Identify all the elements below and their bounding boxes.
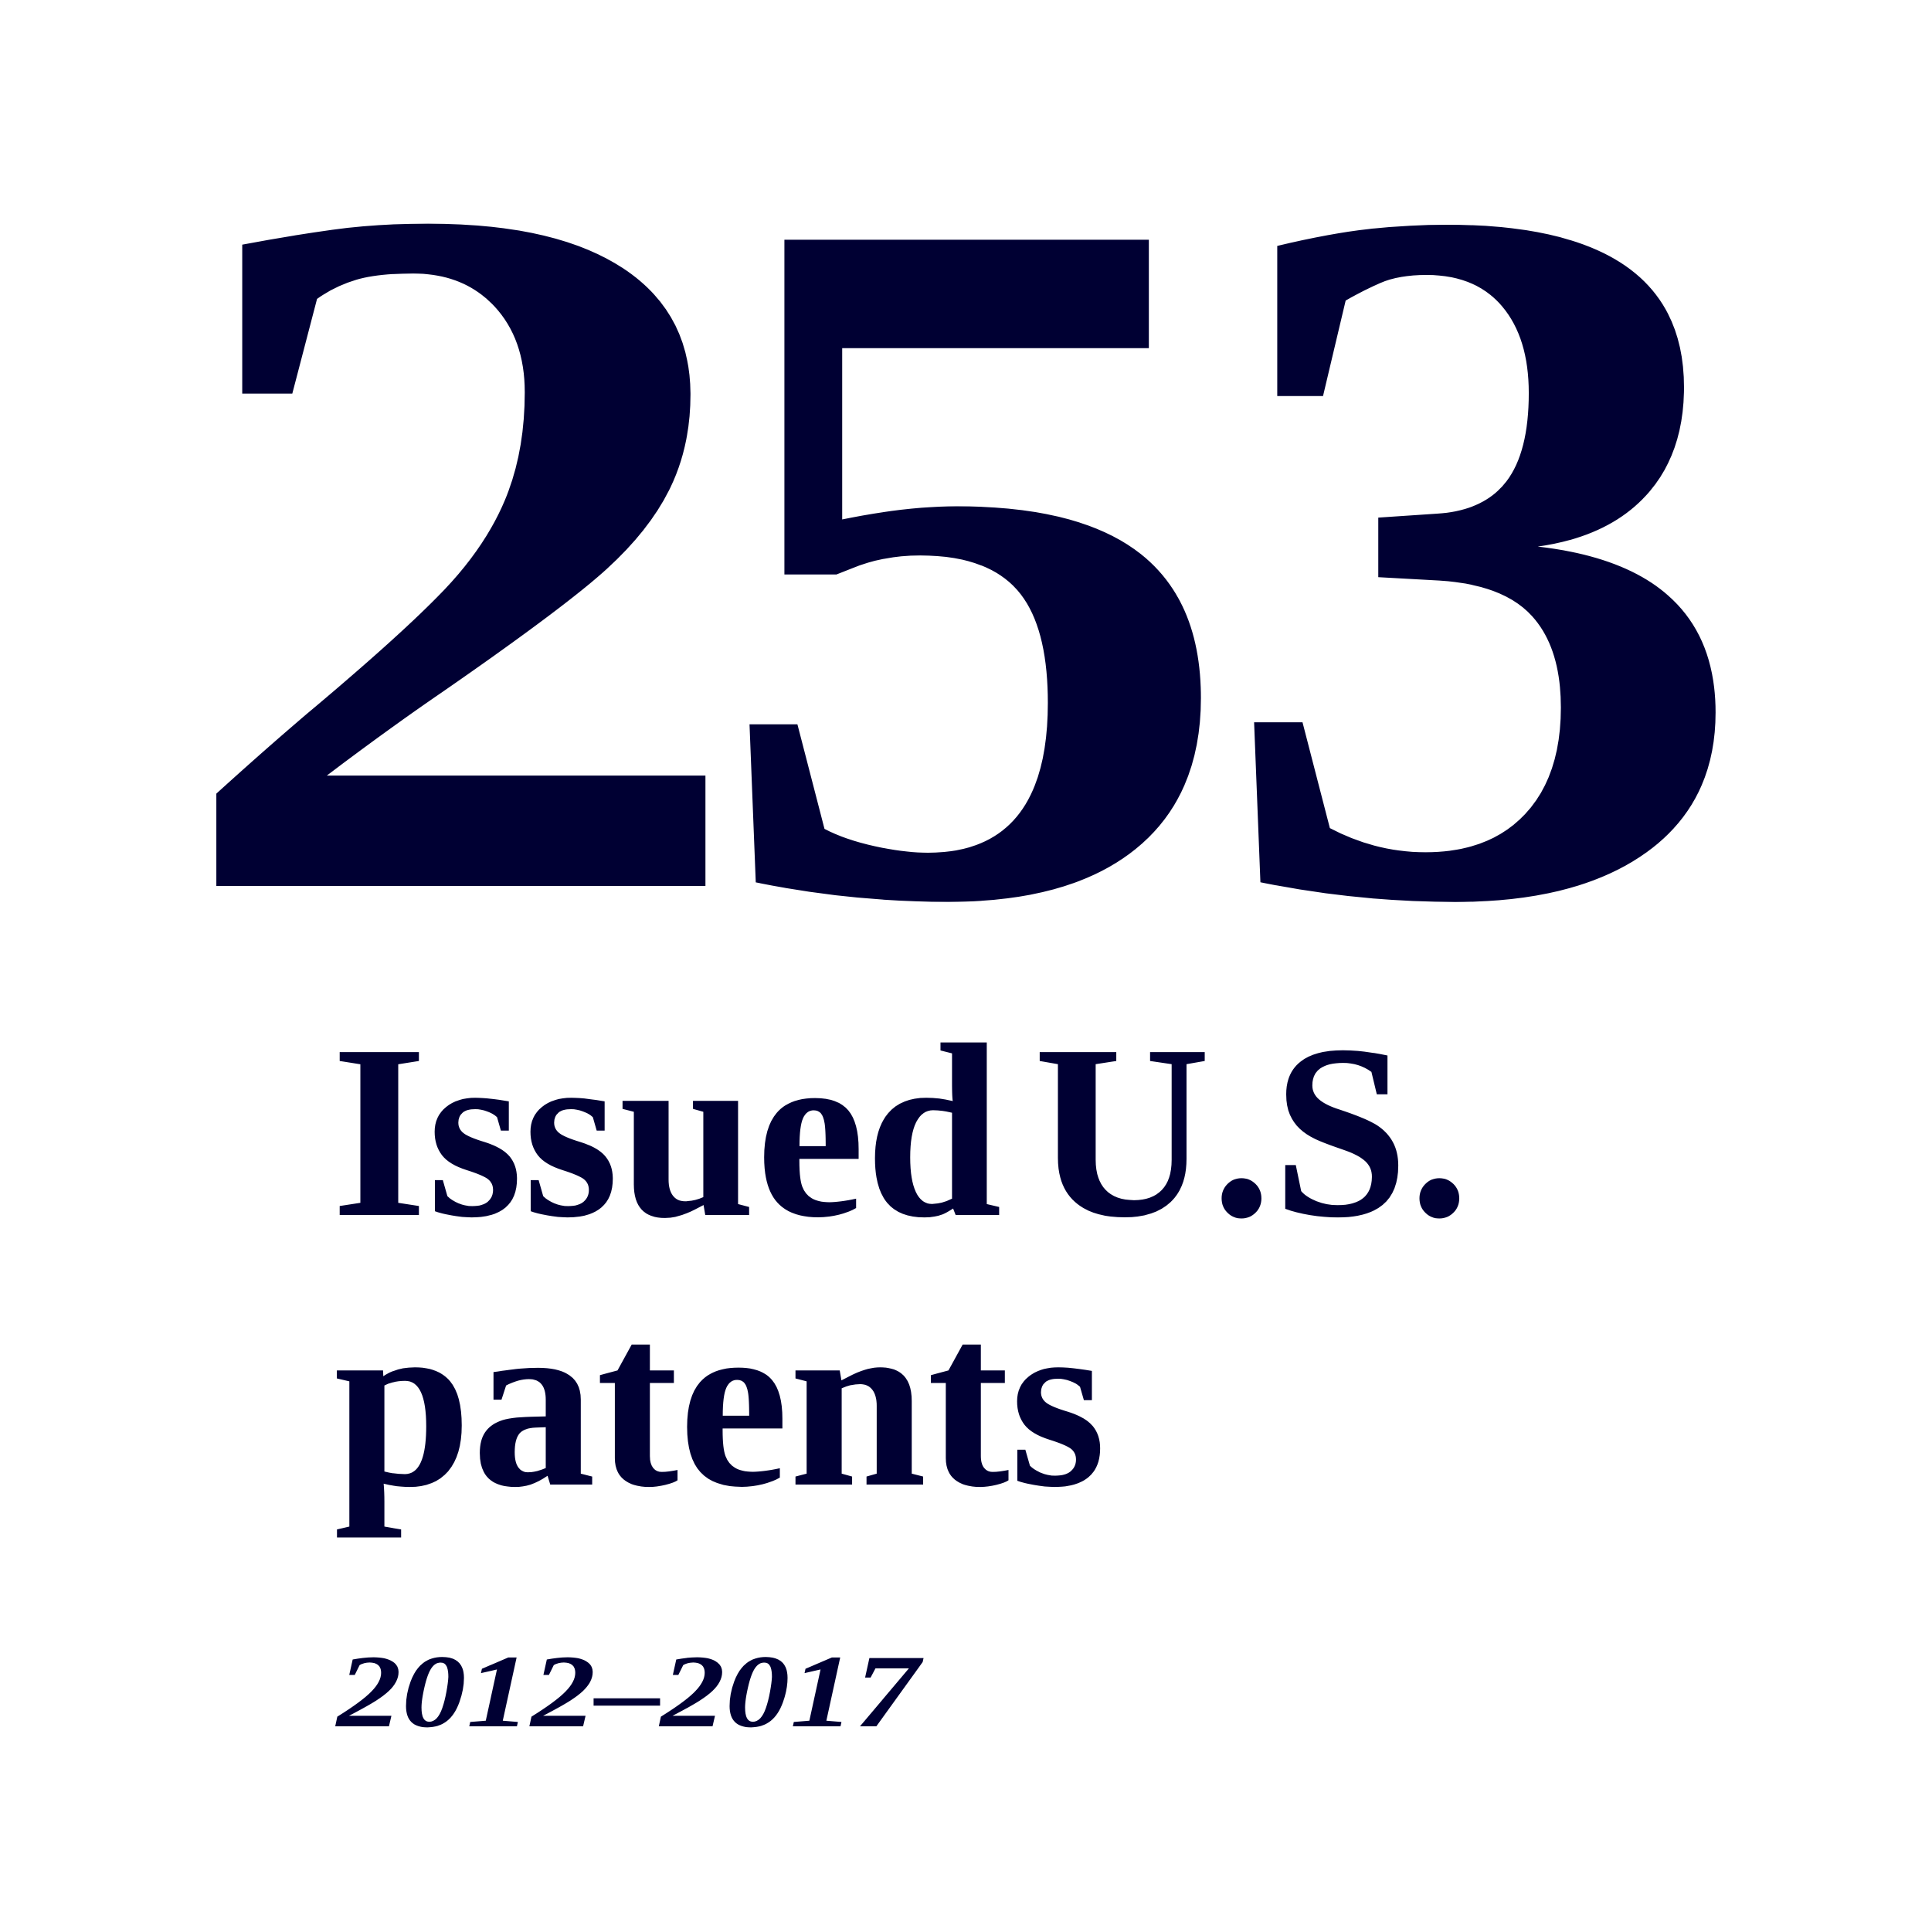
big number: 253: 5 [707, 5, 1240, 1108]
big number: 253 [167, 0, 1753, 1111]
heading line: Issued U.S. [331, 993, 1470, 1269]
heading line: Issued U.S.: U.S. [1034, 993, 1470, 1269]
big number: 253: 2 [167, 0, 756, 1103]
date range: 2012–2017 [335, 1634, 924, 1749]
heading line: patents: patents [334, 1263, 1106, 1539]
heading line: Issued U.S.: Issued [331, 993, 1002, 1269]
big number: 253: 3 [1214, 0, 1753, 1111]
